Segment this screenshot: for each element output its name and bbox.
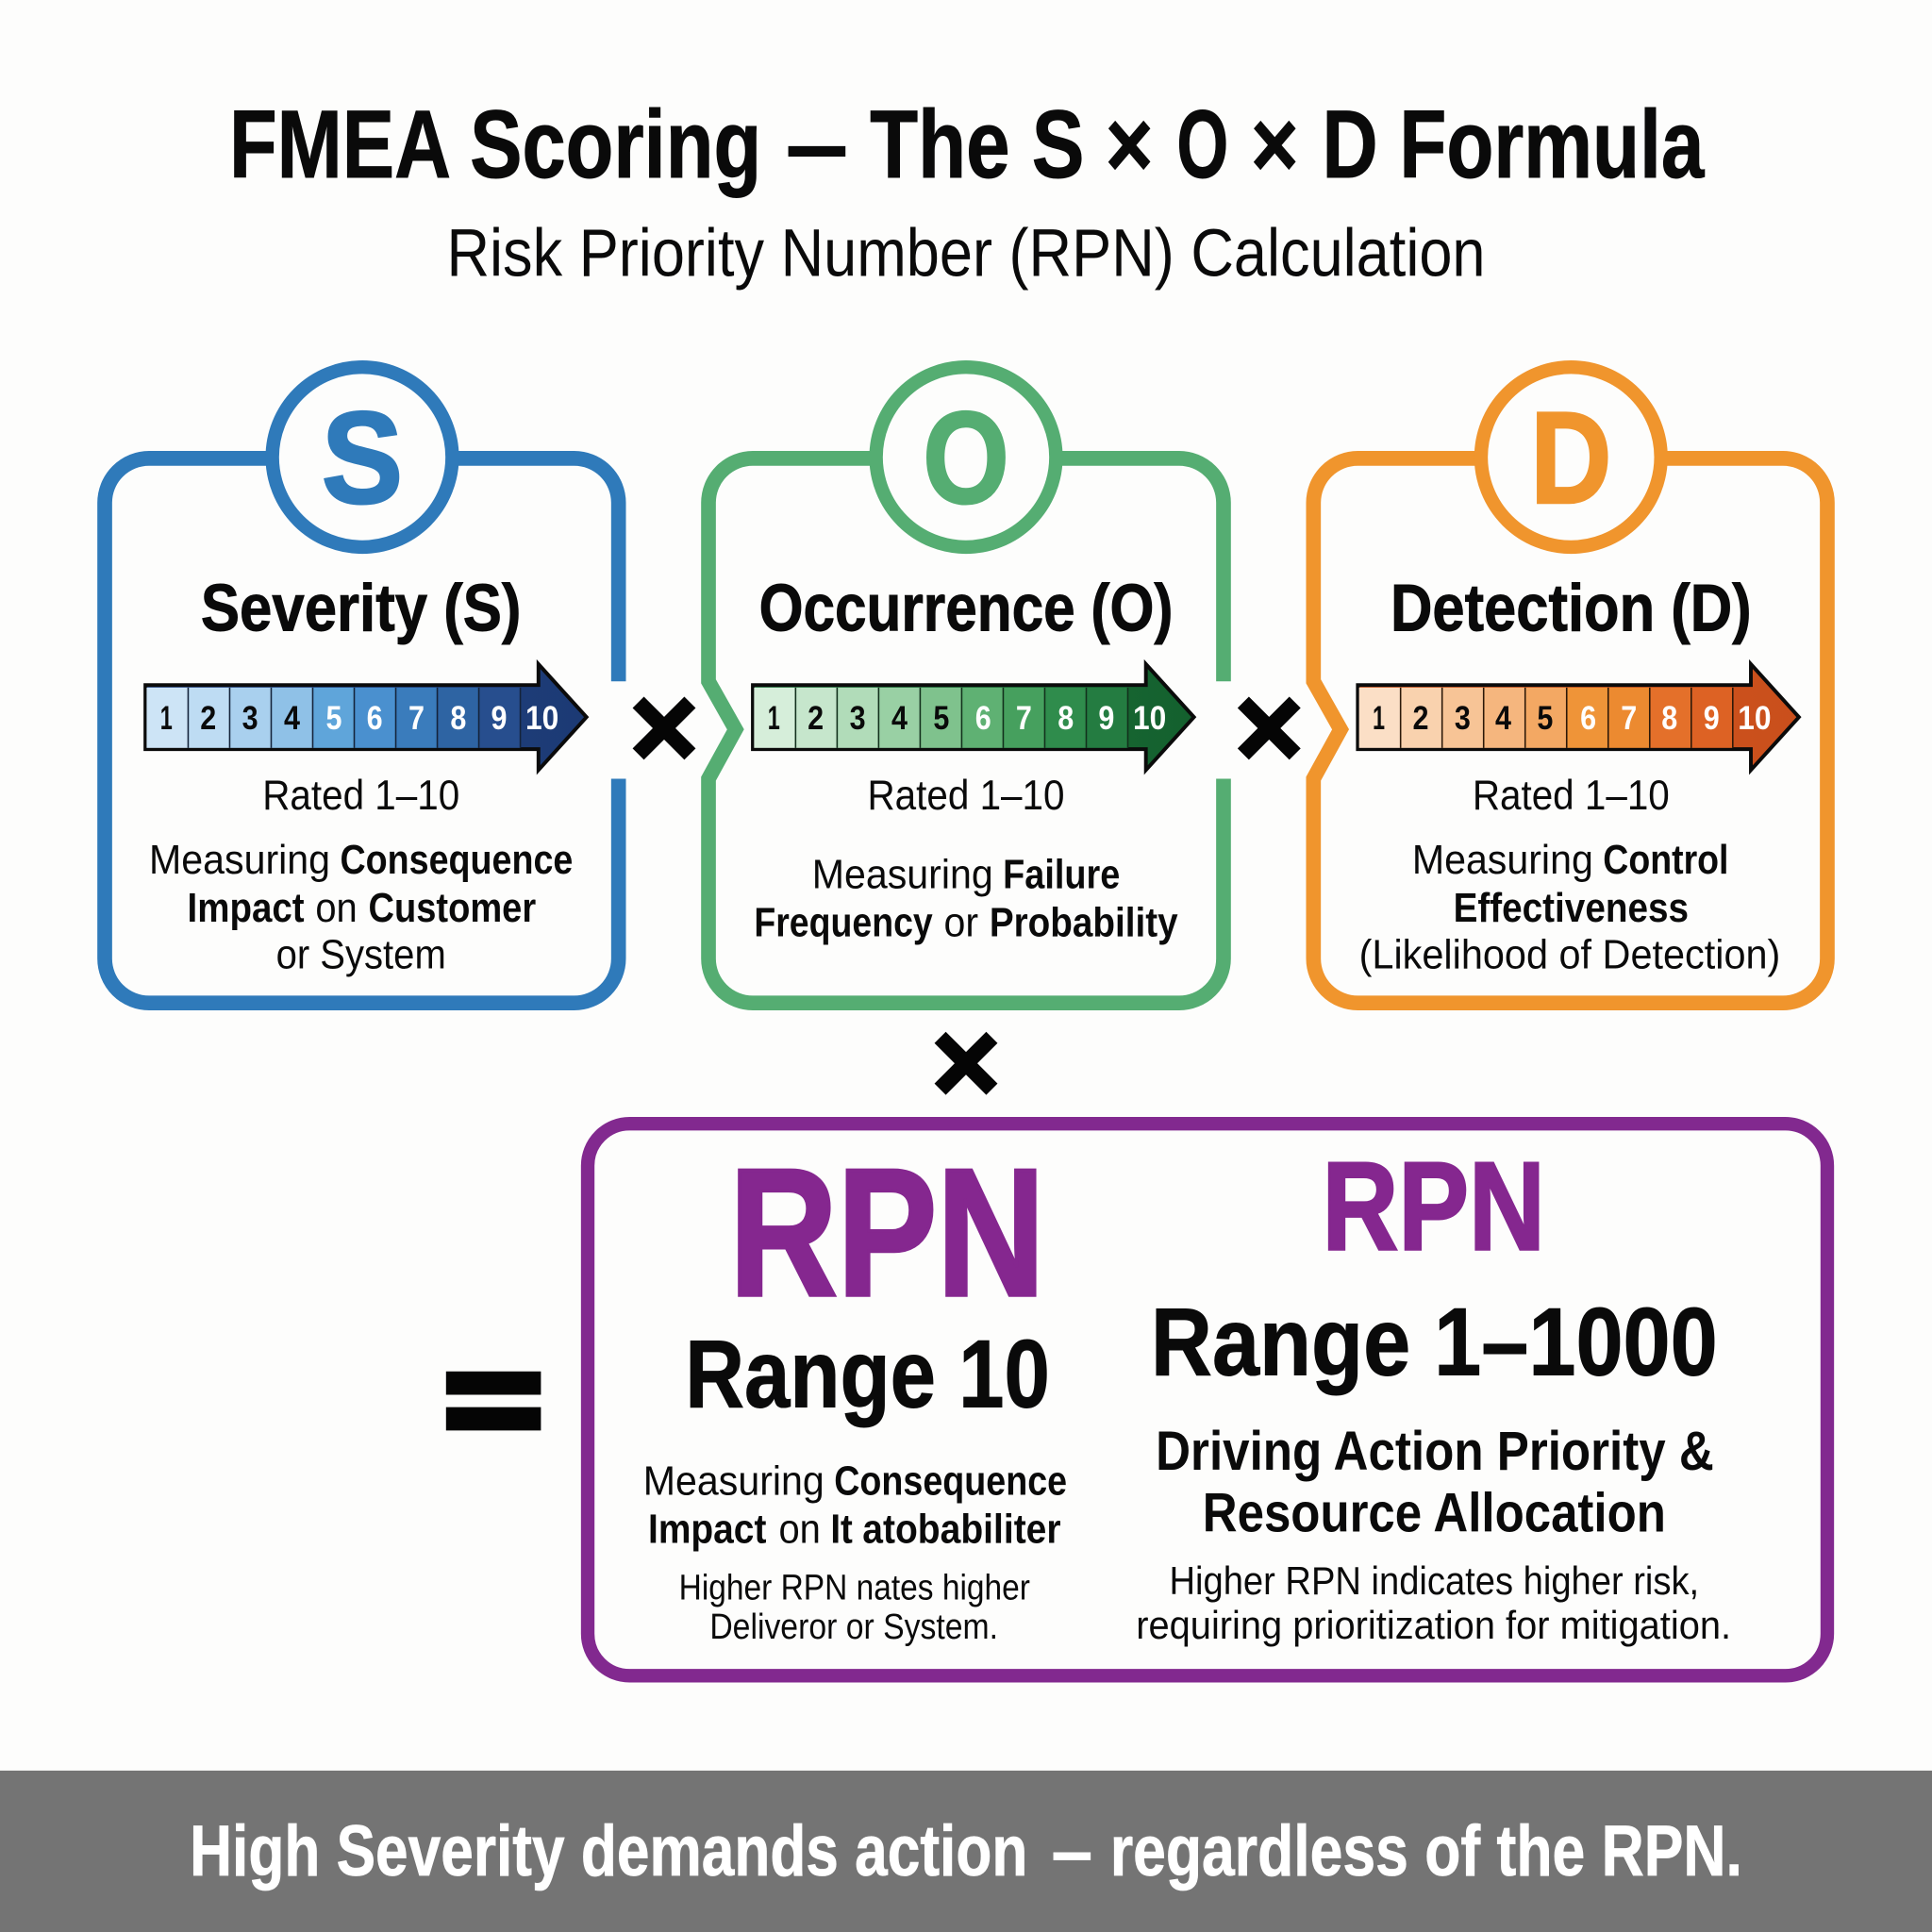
- scale arrow: severity 1 to 10: 6: [367, 700, 383, 737]
- scale arrow: detection 1 to 10: 3: [1455, 700, 1471, 737]
- RPN right column: RPN: [1322, 1136, 1545, 1276]
- description: detection: Measuring: [1412, 838, 1593, 883]
- scale arrow: detection 1 to 10: [1357, 664, 1799, 770]
- panel border: detection: [1313, 458, 1827, 1003]
- panel border: occurrence: [708, 458, 1224, 1003]
- title: ×: [1106, 91, 1154, 198]
- scale arrow: detection 1 to 10: 2: [1412, 700, 1428, 737]
- footer banner: High Severity demands action: [190, 1811, 1027, 1891]
- title: —: [789, 91, 845, 198]
- multiply sign: S and O: [639, 702, 690, 754]
- description: occurrence: Measuring: [812, 853, 993, 898]
- icon: O badge: O: [923, 386, 1009, 531]
- panel: occurrence: [708, 367, 1224, 1003]
- panel border: RPN: [588, 1124, 1827, 1675]
- description: severity: Measuring: [149, 838, 330, 883]
- icon: O badge: [876, 367, 1056, 547]
- scale arrow: detection 1 to 10: 1: [1373, 700, 1385, 737]
- title: FMEA Scoring: [229, 91, 761, 198]
- description: severity: Impact: [188, 886, 305, 931]
- RPN left column: Impact: [648, 1507, 766, 1552]
- RPN left column: It: [830, 1507, 853, 1552]
- scale arrow: occurrence 1 to 10: [753, 664, 1194, 770]
- RPN left column: Consequence: [834, 1458, 1067, 1504]
- icon: S badge: [273, 367, 452, 547]
- rating label: severity: Rated 1–10: [262, 773, 459, 819]
- scale arrow: detection 1 to 10: 9: [1704, 700, 1720, 737]
- scale arrow: severity 1 to 10: 2: [200, 700, 216, 737]
- icon: D badge: D: [1530, 386, 1611, 531]
- description: severity: on: [315, 886, 358, 931]
- description: occurrence: Frequency: [754, 901, 933, 946]
- RPN right column: [1136, 1136, 1731, 1647]
- description: detection: (Likelihood of Detection): [1359, 933, 1780, 978]
- RPN right column: Driving Action Priority &: [1156, 1421, 1714, 1482]
- RPN left column: [643, 1131, 1067, 1647]
- scale arrow: detection 1 to 10: 4: [1495, 700, 1511, 737]
- panel: detection: [1313, 367, 1827, 1003]
- heading: detection: Detection (D): [1391, 571, 1752, 645]
- description: occurrence: or: [943, 901, 978, 946]
- subtitle: Risk Priority Number (RPN) Calculation: [446, 216, 1486, 291]
- scale arrow: detection 1 to 10: 8: [1661, 700, 1677, 737]
- scale arrow: occurrence 1 to 10: 6: [975, 700, 991, 737]
- scale arrow: detection 1 to 10: 6: [1580, 700, 1596, 737]
- description: severity: [149, 838, 573, 978]
- description: severity: Consequence: [340, 838, 573, 883]
- heading: occurrence: Occurrence (O): [759, 571, 1173, 645]
- scale arrow: severity 1 to 10: 9: [491, 700, 507, 737]
- description: detection: Effectiveness: [1454, 886, 1689, 931]
- description: detection: Control: [1603, 838, 1728, 883]
- multiply sign: O and D: [1243, 702, 1295, 754]
- RPN right column: Higher RPN indicates higher risk,: [1170, 1558, 1699, 1603]
- scale arrow: occurrence 1 to 10: 5: [933, 700, 949, 737]
- scale arrow: occurrence 1 to 10: 10: [1133, 700, 1166, 737]
- scale arrow: occurrence 1 to 10: 7: [1016, 700, 1032, 737]
- description: severity: Customer: [369, 886, 536, 931]
- title: D Formula: [1322, 91, 1705, 198]
- panel: RPN result: [588, 1124, 1827, 1675]
- scale arrow: detection 1 to 10: 10: [1738, 700, 1772, 737]
- equals sign: [446, 1383, 541, 1419]
- rating label: detection: Rated 1–10: [1473, 773, 1670, 819]
- scale arrow: occurrence 1 to 10: 9: [1098, 700, 1114, 737]
- footer banner: regardless of the RPN.: [1110, 1811, 1742, 1891]
- RPN left column: on: [778, 1507, 821, 1552]
- panel border: severity: [105, 458, 619, 1003]
- title: O: [1176, 91, 1228, 198]
- scale arrow: severity 1 to 10: 3: [242, 700, 258, 737]
- title: ×: [1251, 91, 1299, 198]
- RPN left column: Higher RPN nates higher: [679, 1568, 1030, 1607]
- scale arrow: occurrence 1 to 10: 1: [768, 700, 780, 737]
- RPN left column: atobabiliter: [862, 1507, 1061, 1552]
- RPN right column: Resource Allocation: [1203, 1483, 1666, 1544]
- scale arrow: occurrence 1 to 10: 8: [1058, 700, 1074, 737]
- description: detection: [1359, 838, 1780, 978]
- scale arrow: severity 1 to 10: [145, 664, 587, 770]
- footer banner: —: [1054, 1811, 1091, 1891]
- scale arrow: severity 1 to 10: 4: [284, 700, 300, 737]
- description: occurrence: Failure: [1003, 853, 1120, 898]
- heading: severity: Severity (S): [201, 571, 521, 645]
- scale arrow: detection 1 to 10: 7: [1621, 700, 1637, 737]
- footer banner: [0, 1771, 1932, 1932]
- scale arrow: severity 1 to 10: 8: [450, 700, 466, 737]
- scale arrow: severity 1 to 10: 1: [160, 700, 173, 737]
- scale arrow: detection 1 to 10: 5: [1537, 700, 1553, 737]
- scale arrow: occurrence 1 to 10: 2: [808, 700, 824, 737]
- scale arrow: occurrence 1 to 10: 3: [850, 700, 866, 737]
- scale arrow: severity 1 to 10: 7: [408, 700, 425, 737]
- icon: D badge: [1481, 367, 1661, 547]
- RPN right column: Range 1–1000: [1151, 1289, 1718, 1396]
- RPN right column: requiring prioritization for mitigation.: [1136, 1603, 1731, 1647]
- panel: severity: [105, 367, 619, 1003]
- description: occurrence: Probability: [990, 901, 1178, 946]
- description: occurrence: [754, 853, 1178, 946]
- RPN left column: Deliveror or System.: [709, 1607, 998, 1647]
- RPN left column: Measuring: [643, 1458, 824, 1504]
- description: severity: or System: [276, 933, 446, 978]
- title: The S: [870, 91, 1084, 198]
- scale arrow: severity 1 to 10: 5: [325, 700, 341, 737]
- icon: S badge: S: [322, 386, 403, 531]
- multiply sign: to RPN: [941, 1038, 991, 1090]
- scale arrow: occurrence 1 to 10: 4: [891, 700, 908, 737]
- RPN left column: Range 10: [685, 1321, 1050, 1428]
- scale arrow: severity 1 to 10: 10: [525, 700, 558, 737]
- rating label: occurrence: Rated 1–10: [868, 773, 1064, 819]
- RPN left column: RPN: [729, 1131, 1045, 1334]
- title: [229, 91, 1705, 198]
